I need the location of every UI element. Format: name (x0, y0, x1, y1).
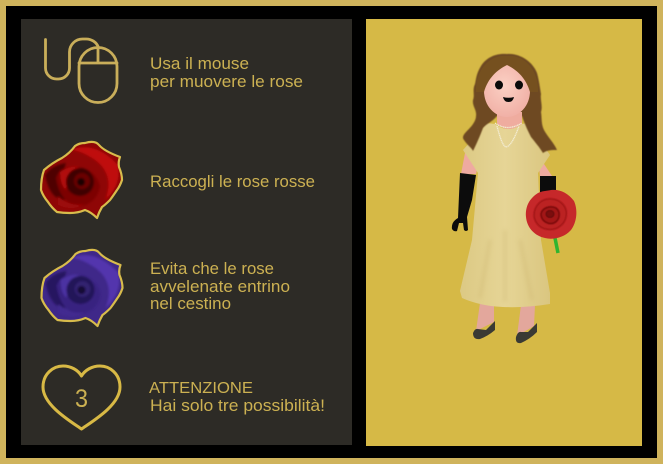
figure: right arm and glove (538, 155, 556, 196)
figure: dress (460, 123, 550, 307)
text: use the mouse: Usa il mouse (150, 55, 249, 73)
text: use the mouse: per muovere le rose (150, 73, 303, 91)
text: use the mouse (150, 55, 303, 91)
panel: character background (366, 19, 642, 446)
figure: face (484, 65, 530, 117)
icon: mouse (46, 39, 117, 102)
figure: left arm and glove (452, 153, 480, 231)
figure: neck (497, 112, 522, 129)
text: warning (149, 380, 325, 415)
figure: woman with rose (452, 54, 576, 343)
panel: instructions (21, 19, 352, 445)
figure: hair fringe (476, 56, 538, 92)
text: avoid poisoned roses (150, 260, 290, 313)
text: collect red roses: Raccogli le rose rosse (150, 173, 315, 191)
text: warning: ATTENZIONE (149, 380, 253, 397)
figure: eyes (495, 80, 523, 90)
figure: dress shading (480, 230, 532, 302)
figure: hair (463, 54, 557, 153)
text: avoid poisoned roses: avvelenate entrino (150, 278, 290, 296)
figure: rose bouquet (526, 190, 576, 253)
figure: legs (476, 303, 535, 336)
icon: red rose (41, 142, 122, 218)
text: avoid poisoned roses: nel cestino (150, 295, 231, 313)
icon: heart with three lives (43, 366, 120, 429)
figure: smile (503, 97, 514, 102)
text: warning: Hai solo tre possibilità! (150, 397, 325, 415)
icon: heart with three lives: 3 (75, 385, 88, 413)
text: avoid poisoned roses: Evita che le rose (150, 260, 274, 278)
figure: shoes (473, 321, 537, 343)
icon: purple rose (42, 250, 122, 326)
figure: pearl necklace (495, 123, 522, 147)
